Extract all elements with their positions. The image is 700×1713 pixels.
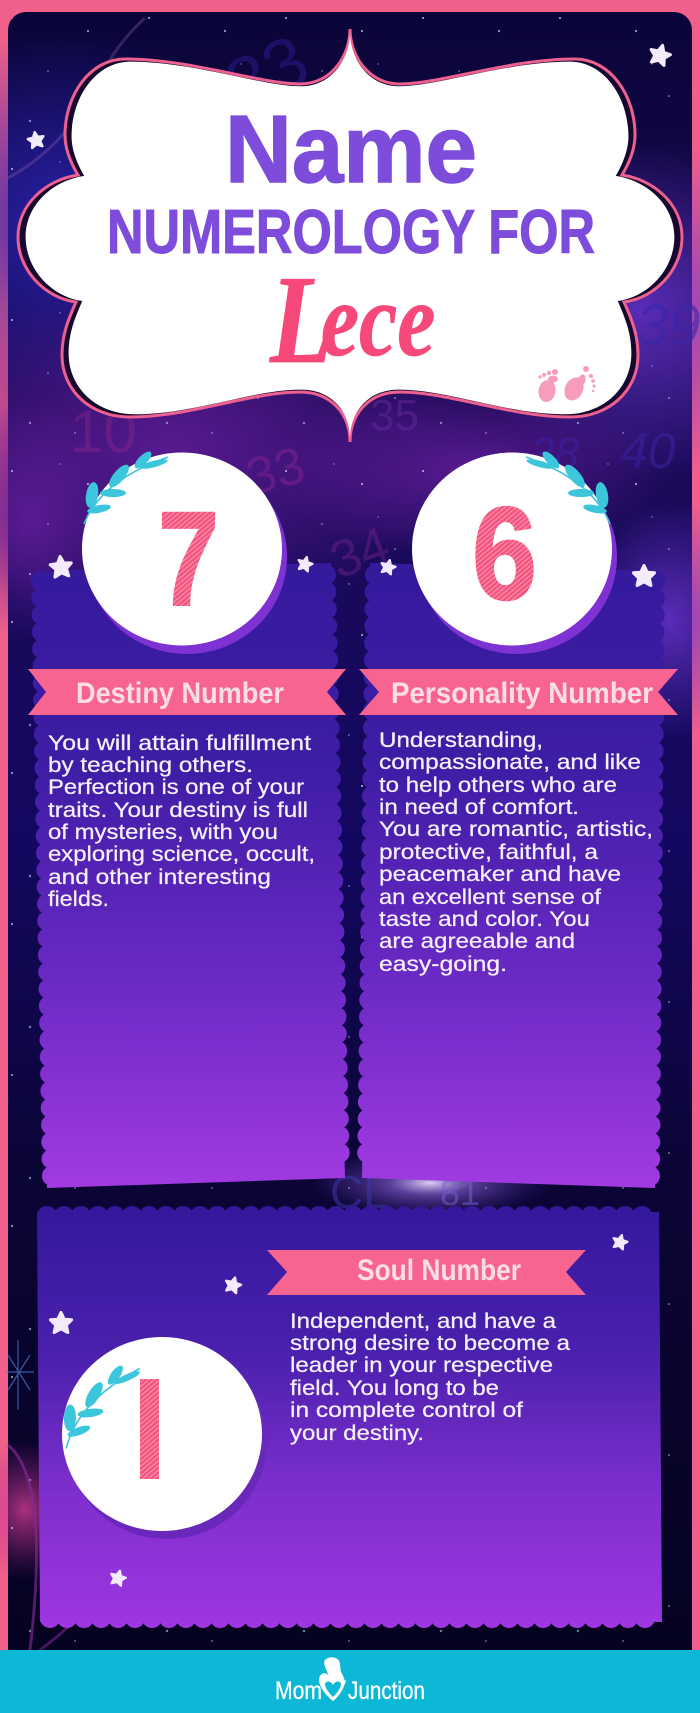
text: destiny description: of mysteries, with you [48,820,278,844]
text: destiny description: exploring science, occult, [48,842,315,866]
text: soul description: leader in your respective [290,1353,553,1377]
decorative star [27,131,45,148]
text: personality description: You are romantic, artistic, [379,817,653,841]
faded background numbers: 81 [440,1172,480,1213]
decorative star [648,43,672,66]
decorative star [109,1569,127,1586]
text: destiny description: You will attain fulfillment [48,731,311,755]
icon: baby feet [537,366,596,404]
text: destiny description [48,731,315,911]
text: personality description: to help others who are [379,773,617,797]
text: destiny description: Perfection is one of your [48,775,304,799]
text: personality description: in need of comfort. [379,795,579,819]
text: soul description: your destiny. [290,1421,424,1445]
text: soul description [290,1309,570,1445]
faded background numbers: 39 [636,293,700,358]
text: personality description: compassionate, and like [379,750,641,774]
decorative star [50,556,72,577]
number circle: 7: 7 [158,485,219,634]
ribbon: destiny number: Destiny Number [76,677,284,710]
text: personality description: easy-going. [379,952,507,976]
text: personality description: protective, faithful, a [379,840,598,864]
decorative star [50,1312,72,1332]
ribbon: soul number: Soul Number [357,1254,521,1287]
number circle: 7 [82,449,287,654]
logo: MomJunction [275,1657,425,1705]
footer bar [0,1650,700,1713]
faded background numbers: 38 [530,429,579,478]
text: soul description: in complete control of [290,1398,523,1422]
faded background numbers: 34 [323,516,397,590]
panel: destiny number [28,449,346,1188]
text: soul description: field. You long to be [290,1376,499,1400]
number circle: 6 [412,449,617,654]
text: destiny description: and other interesting [48,865,271,889]
ribbon: destiny number [28,669,346,715]
panel: personality number [359,449,678,1188]
logo: MomJunction: Junction [348,1677,425,1705]
text: personality description: are agreeable and [379,929,575,953]
faded background numbers: 10 [70,398,137,465]
number circle: 1: 1 [118,1352,196,1509]
decorative star [296,555,314,572]
ribbon: soul number [267,1250,586,1295]
title: Lece: ece [321,261,435,378]
faded background numbers: 40 [620,423,676,479]
decorative star [611,1233,629,1250]
faded background numbers: 33 [240,436,311,507]
faded background numbers: CL [330,1166,389,1218]
panel: soul number [37,1212,662,1622]
decorative star [634,566,654,585]
number circle: 6: 6 [472,480,537,627]
faded background numbers: 83 [214,20,320,126]
background constellation lines [6,18,145,1650]
number circle: 1 [55,1337,267,1539]
icon: mother and heart [319,1657,346,1701]
logo: MomJunction: Mom [275,1677,322,1705]
text: personality description: Understanding, [379,728,543,752]
text: soul description: Independent, and have a [290,1309,556,1333]
text: personality description: peacemaker and have [379,862,621,886]
ribbon: personality number [359,669,678,715]
decorative star [224,1275,243,1294]
text: destiny description: traits. Your destiny is full [48,798,308,822]
text: personality description: taste and color. You [379,907,590,931]
text: personality description: an excellent sense of [379,885,601,909]
decorative star [379,558,397,575]
text: personality description [379,728,653,976]
title plaque [18,29,682,442]
ribbon: personality number: Personality Number [391,677,653,710]
title: Numerology for: NUMEROLOGY FOR [107,198,595,267]
text: soul description: strong desire to become a [290,1331,570,1355]
text: destiny description: fields. [48,887,109,911]
faded background numbers [70,20,700,1218]
text: destiny description: by teaching others. [48,753,253,777]
title: Lece: L [269,249,333,389]
title: Name: Name [225,96,477,203]
faded background numbers: 35 [370,391,419,440]
